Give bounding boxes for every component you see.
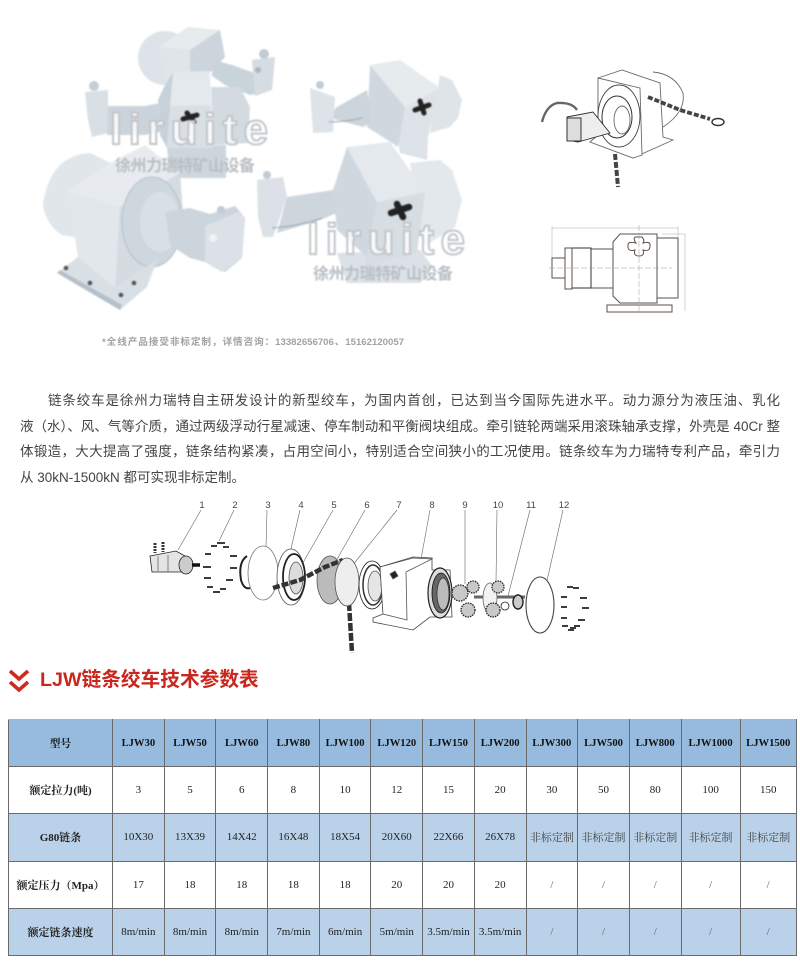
table: technical parameters: 额定链条速度 <box>28 927 94 939</box>
table: technical parameters: 非标定制 <box>633 832 677 844</box>
table: technical parameters: 3 <box>136 784 141 796</box>
table: technical parameters: 18 <box>288 879 299 891</box>
part labels: 2 <box>232 500 238 511</box>
table: technical parameters: 150 <box>760 784 776 796</box>
table: technical parameters: LJW300 <box>532 738 571 749</box>
text block: introduction: 链条绞车是徐州力瑞特自主研发设计的新型绞车，为国内首创，已达到当今国际先进水平。动力源分为液压油、乳化 <box>48 393 780 408</box>
table: technical parameters: LJW800 <box>636 738 675 749</box>
table: technical parameters: / <box>709 926 712 938</box>
table: technical parameters: LJW500 <box>584 738 623 749</box>
icon: double chevron <box>8 670 30 692</box>
table: technical parameters: 额定拉力(吨) <box>29 785 92 797</box>
part labels: 9 <box>462 500 468 511</box>
table: technical parameters: 10X30 <box>123 831 153 843</box>
part 5-6: chain wheel and chain <box>273 556 359 653</box>
table: technical parameters: 3.5m/min <box>427 926 470 938</box>
table: technical parameters: LJW1000 <box>688 738 733 749</box>
table: technical parameters: 5m/min <box>380 926 414 938</box>
table: technical parameters: 非标定制 <box>582 832 626 844</box>
watermark: Chinese lower: 徐州力瑞特矿山设备 <box>313 260 453 284</box>
part 11: sun gear <box>513 595 523 609</box>
table: technical parameters: 型号 <box>50 739 71 750</box>
part labels: 3 <box>265 500 271 511</box>
table: technical parameters: / <box>654 879 657 891</box>
part 8: housing <box>373 557 452 630</box>
winch: right bottom <box>257 142 462 283</box>
table: technical parameters: 20 <box>443 879 454 891</box>
table: technical parameters: / <box>767 926 770 938</box>
table: technical parameters: G80链条 <box>40 832 81 844</box>
table: technical parameters: 6m/min <box>328 926 362 938</box>
part 10: planet carrier <box>474 581 525 617</box>
part labels: 1 <box>199 500 205 511</box>
table: technical parameters: 20X60 <box>382 831 412 843</box>
table: technical parameters: LJW60 <box>225 738 258 749</box>
table: technical parameters: 16X48 <box>278 831 308 843</box>
table: technical parameters <box>8 719 797 956</box>
part labels: 10 <box>493 500 503 511</box>
part labels <box>199 500 569 511</box>
table: technical parameters: 50 <box>598 784 609 796</box>
part labels: 4 <box>298 500 304 511</box>
table: technical parameters: 10 <box>340 784 351 796</box>
table: technical parameters: LJW120 <box>377 738 416 749</box>
table: technical parameters: 17 <box>133 879 144 891</box>
winch: right top <box>310 60 462 160</box>
part labels: 11 <box>526 500 536 511</box>
table: technical parameters: LJW1500 <box>746 738 790 749</box>
table: technical parameters: 30 <box>546 784 557 796</box>
text block: introduction: 从 30kN-1500kN 都可实现非标定制。 <box>20 470 245 485</box>
text block: introduction: 液（水）、风、气等介质，通过两级浮动行星减速、停车制动和平衡阀块组成。牵引链轮两端采用滚珠轴承支撑，外壳是 40Cr 整 <box>20 419 780 434</box>
table: technical parameters: 80 <box>650 784 661 796</box>
table: technical parameters: 6 <box>239 784 244 796</box>
part labels: 7 <box>396 500 402 511</box>
part labels: 5 <box>331 500 337 511</box>
table: technical parameters: 20 <box>495 784 506 796</box>
table: technical parameters: 8m/min <box>121 926 155 938</box>
table: technical parameters: / <box>767 879 770 891</box>
table: technical parameters: 13X39 <box>175 831 205 843</box>
table: technical parameters: 8m/min <box>225 926 259 938</box>
table: technical parameters: / <box>602 879 605 891</box>
table: technical parameters: LJW50 <box>173 738 207 749</box>
product photos: chain winches <box>42 27 465 310</box>
table: technical parameters: LJW30 <box>122 738 155 749</box>
part 7: bearing <box>359 561 385 609</box>
watermark: Chinese upper: 徐州力瑞特矿山设备 <box>115 152 255 176</box>
table: technical parameters: 22X66 <box>433 831 463 843</box>
table: technical parameters: 12 <box>391 784 402 796</box>
part 3: cover disc <box>240 546 278 600</box>
table: technical parameters: 15 <box>443 784 454 796</box>
table: technical parameters: 5 <box>187 784 193 796</box>
table: technical parameters: / <box>654 926 657 938</box>
table: technical parameters: LJW100 <box>326 738 365 749</box>
exploded diagram <box>150 500 589 654</box>
table: technical parameters: 100 <box>702 784 719 796</box>
part 4: bearing ring <box>277 549 305 605</box>
table: technical parameters: 非标定制 <box>689 832 733 844</box>
leader lines <box>178 510 563 596</box>
text block: introduction: 体锻造，大大提高了强度，链条结构紧凑，占用空间小，特别适合空间狭小的工况使用。链条绞车为力瑞特专利产品，牵引力 <box>20 444 780 459</box>
table: technical parameters: 14X42 <box>227 831 257 843</box>
table: technical parameters: 18X54 <box>330 831 360 843</box>
table: technical parameters: 非标定制 <box>746 832 790 844</box>
text block: introduction <box>20 393 780 485</box>
part 12: end disc <box>526 577 554 633</box>
winch: front middle <box>85 71 250 178</box>
part 12: bolts <box>561 587 589 630</box>
winch: rear top <box>138 27 275 96</box>
table: technical parameters: 20 <box>495 879 506 891</box>
heading: parameter table: LJW链条绞车技术参数表 <box>40 669 259 691</box>
winch: bottom left <box>43 145 245 310</box>
drawing: winch perspective line art <box>540 70 725 188</box>
table: technical parameters: / <box>709 879 712 891</box>
part labels: 12 <box>559 500 569 511</box>
part labels: 8 <box>429 500 435 511</box>
part 2: bolts <box>203 543 237 592</box>
table: technical parameters: 18 <box>185 879 196 891</box>
table: technical parameters: 18 <box>236 879 247 891</box>
table: technical parameters: 3.5m/min <box>479 926 521 938</box>
table: technical parameters: 8m/min <box>173 926 207 938</box>
table: technical parameters: 7m/min <box>276 926 311 938</box>
table: technical parameters: / <box>602 926 605 938</box>
watermark: liruite upper: liruite <box>110 105 268 154</box>
watermark: liruite lower: liruite <box>307 215 465 264</box>
table: technical parameters: / <box>550 879 553 891</box>
table: technical parameters: LJW150 <box>429 738 468 749</box>
table: technical parameters: 非标定制 <box>530 832 574 844</box>
table: technical parameters: 26X78 <box>485 831 515 843</box>
part 9: planet gears <box>452 581 479 617</box>
drawing: winch side view line art <box>549 225 686 312</box>
part 1: motor <box>150 542 200 574</box>
table: technical parameters: 18 <box>340 879 351 891</box>
caption: customization note: *全线产品接受非标定制，详情咨询：13382656706、15162120057 <box>102 337 404 348</box>
table: technical parameters: 20 <box>391 879 402 891</box>
table: technical parameters: 8 <box>291 784 296 796</box>
table: technical parameters: LJW200 <box>481 738 520 749</box>
table: technical parameters: LJW80 <box>277 738 310 749</box>
table: technical parameters: / <box>550 926 553 938</box>
table: technical parameters: 额定压力（Mpa） <box>16 880 104 892</box>
part labels: 6 <box>364 500 370 511</box>
